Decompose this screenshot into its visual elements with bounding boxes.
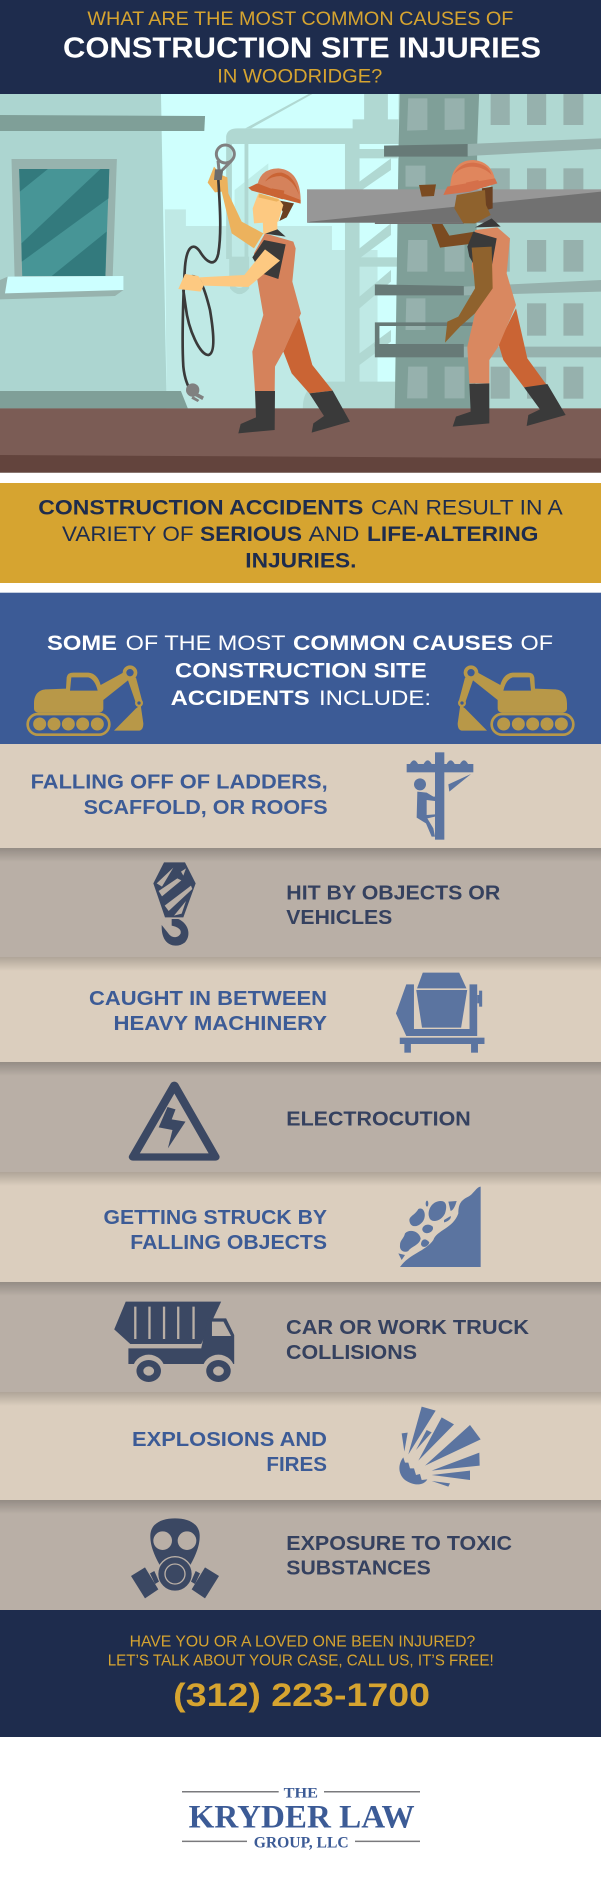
row: falling objects (0, 1172, 601, 1282)
gold statement banner: CAN RESULT IN A (371, 497, 563, 520)
heading text: CONSTRUCTION SITE (175, 660, 427, 683)
heading text (47, 632, 553, 710)
ground (0, 408, 601, 473)
icon: crane hook (153, 862, 196, 946)
row: caught in machinery (0, 957, 601, 1062)
row: collisions (0, 1282, 601, 1392)
icon: excavator left (28, 665, 143, 735)
row: collisions: COLLISIONS (286, 1342, 417, 1364)
icon: dump truck (114, 1302, 235, 1385)
logo: The Kryder Law Group (182, 1786, 420, 1851)
row: hit by objects (0, 848, 601, 957)
row: explosions: EXPLOSIONS AND (132, 1429, 327, 1451)
icon: gas mask (131, 1518, 219, 1598)
title banner: WHAT ARE THE MOST COMMON CAUSES OF (87, 8, 513, 30)
gold statement banner: AND (308, 523, 360, 546)
row: hit by objects: VEHICLES (286, 907, 392, 929)
hero illustration: construction workers (0, 94, 601, 473)
phone number: (312) 223-1700 (173, 1677, 430, 1713)
row: toxic substances: SUBSTANCES (286, 1558, 431, 1580)
icon: cement mixer (396, 973, 484, 1053)
call to action panel (0, 1610, 601, 1737)
title banner (0, 0, 601, 94)
row: electrocution: ELECTROCUTION (286, 1108, 471, 1130)
row: electrocution (0, 1062, 601, 1172)
heading text: SOME (47, 632, 117, 655)
worker back arm behind beam (431, 223, 475, 248)
row: toxic substances (0, 1500, 601, 1610)
row: toxic substances: EXPOSURE TO TOXIC (286, 1533, 512, 1555)
heading text: INCLUDE: (319, 687, 431, 710)
icon: worker climbing utility pole (407, 752, 473, 840)
row: caught in machinery: CAUGHT IN BETWEEN (89, 988, 327, 1010)
concrete beam (307, 189, 601, 224)
gold statement banner: SERIOUS (200, 523, 302, 546)
background tower (375, 94, 601, 408)
call to action panel: LET’S TALK ABOUT YOUR CASE, CALL US, IT’S FREE! (108, 1653, 494, 1670)
title banner: CONSTRUCTION SITE INJURIES (63, 32, 541, 64)
title banner: IN WOODRIDGE? (217, 66, 382, 88)
row: explosions: FIRES (266, 1454, 327, 1476)
call to action panel: HAVE YOU OR A LOVED ONE BEEN INJURED? (130, 1634, 475, 1651)
worker with power cord (178, 145, 350, 433)
worker carrying beam (419, 160, 566, 427)
icon: excavator right (458, 665, 573, 735)
logo: The Kryder Law Group: GROUP, LLC (254, 1834, 349, 1851)
heading text: COMMON CAUSES (293, 632, 513, 655)
row: falling objects: GETTING STRUCK BY (104, 1207, 328, 1229)
icon: high voltage warning triangle (133, 1085, 215, 1157)
row: collisions: CAR OR WORK TRUCK (286, 1317, 530, 1339)
row: falling off ladders: FALLING OFF OF LADDERS, (31, 771, 328, 793)
row: explosions (0, 1392, 601, 1500)
logo: The Kryder Law Group: KRYDER LAW (189, 1799, 415, 1835)
logo: The Kryder Law Group: THE (284, 1786, 318, 1802)
heading text: OF THE MOST (126, 632, 286, 655)
gold statement banner: VARIETY OF (62, 523, 194, 546)
row: falling off ladders (0, 744, 601, 848)
left building (0, 94, 205, 408)
heading text: OF (520, 632, 553, 655)
gold statement banner: INJURIES. (245, 550, 356, 573)
icon: rockslide (398, 1187, 481, 1267)
illustration background: buildings and crane (0, 94, 601, 473)
row: hit by objects: HIT BY OBJECTS OR (286, 882, 501, 904)
gold statement banner: LIFE-ALTERING (367, 523, 538, 546)
gold statement banner: CONSTRUCTION ACCIDENTS (38, 497, 363, 520)
row: falling off ladders: SCAFFOLD, OR ROOFS (84, 797, 328, 819)
blue section heading panel (0, 593, 601, 744)
row: falling objects: FALLING OBJECTS (130, 1232, 327, 1254)
row: caught in machinery: HEAVY MACHINERY (114, 1013, 328, 1035)
gold statement banner (0, 483, 601, 583)
icon: explosion (399, 1407, 481, 1487)
heading text: ACCIDENTS (171, 687, 310, 710)
